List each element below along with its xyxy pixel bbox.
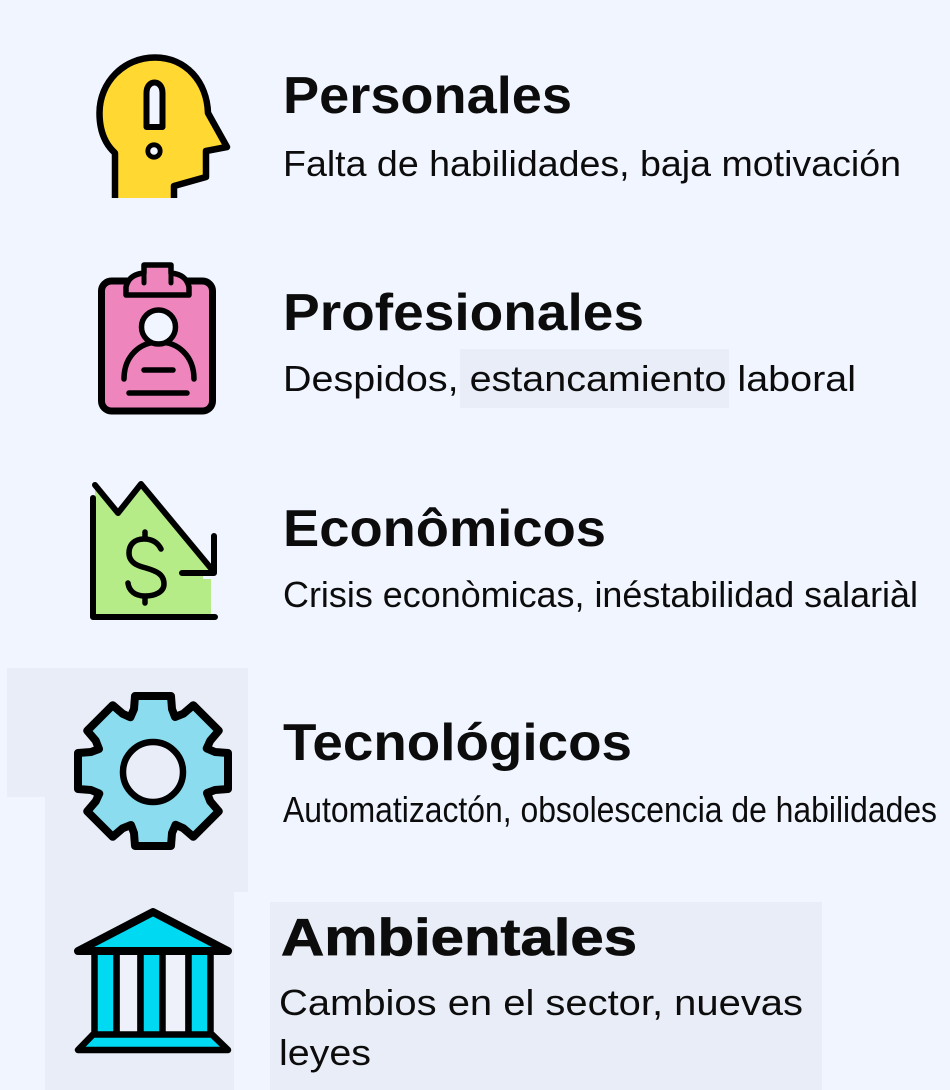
heading: Personales: Personales (283, 67, 572, 125)
text: Económicos description: Crisis econòmicas, inéstabilidad salariàl (283, 574, 918, 615)
icon: classical building (78, 912, 228, 1050)
text: Ambientales description line 1: Cambios en el sector, nuevas (279, 982, 803, 1023)
text: Ambientales description line 2: leyes (279, 1032, 371, 1073)
heading: Tecnológicos: Tecnológicos (283, 714, 632, 772)
heading: Económicos: Econômicos (283, 500, 606, 558)
text: Personales description: Falta de habilidades, baja motivación (283, 143, 901, 184)
heading: Profesionales: Profesionales (283, 284, 644, 342)
heading: Ambientales: Ambientales (281, 909, 637, 967)
text: Profesionales description: Despidos, estancamiento laboral (283, 358, 856, 399)
icon: gear (78, 696, 228, 846)
icon: falling chart with dollar sign (93, 484, 215, 617)
icon: clipboard with person (102, 265, 212, 411)
icon: head with exclamation mark (100, 58, 227, 198)
